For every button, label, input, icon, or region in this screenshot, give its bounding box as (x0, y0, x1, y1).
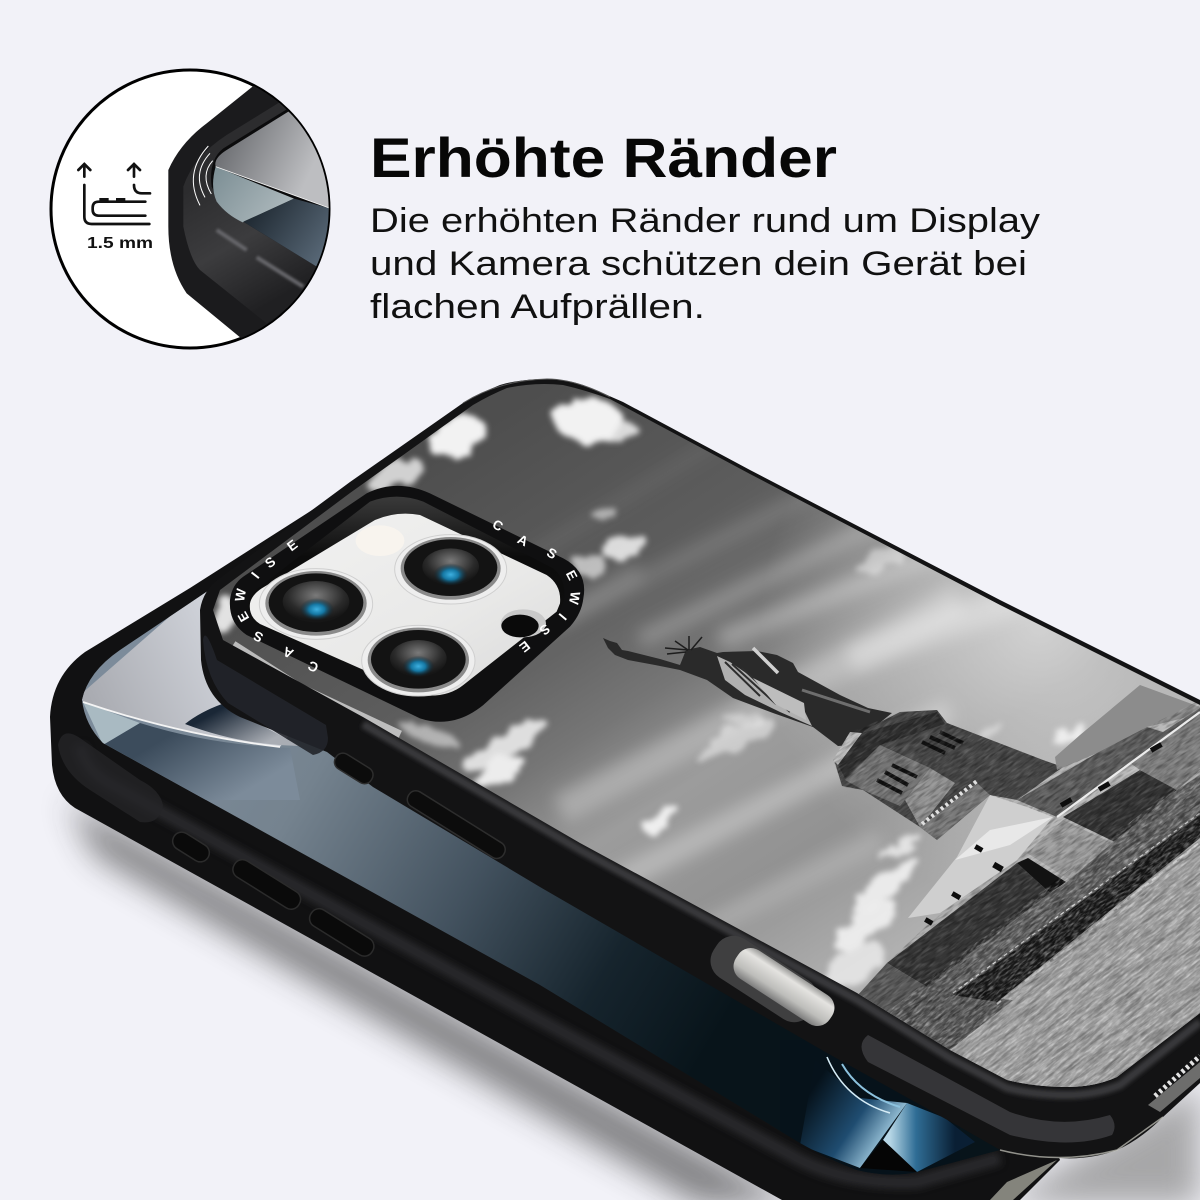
back phone camera control pad (58, 733, 163, 822)
statue (603, 636, 892, 746)
label: 1.5 mm: 1.5 mm (87, 235, 153, 252)
back phone buttons (169, 829, 377, 960)
ring (230, 486, 584, 722)
wallpaper panes at corner (800, 1056, 975, 1172)
ring lettering: CASEWISE: C (490, 517, 506, 534)
circle background (51, 70, 329, 348)
pedestal (833, 710, 1063, 840)
detail phone corner (168, 86, 329, 338)
silver camera plate (250, 514, 560, 696)
lens 3 (362, 625, 475, 696)
ring lettering: CASEWISE: E (517, 638, 533, 655)
ring lettering: CASEWISE: S (544, 545, 559, 562)
ring lettering: CASEWISE: C (305, 658, 321, 675)
ring lettering: CASEWISE: E (284, 537, 300, 554)
ring inner wall (248, 497, 564, 697)
ring lettering: CASEWISE: A (515, 532, 531, 549)
sky streaks (552, 495, 1018, 926)
ring lettering: CASEWISE: E (235, 609, 252, 624)
charging port (703, 928, 840, 1032)
edge shine (1000, 1117, 1163, 1158)
body text: Die erhöhten Ränder rund um Display (370, 202, 1040, 240)
water (890, 768, 1200, 1087)
microphone dot (501, 609, 546, 637)
ring lettering: CASEWISE: I (556, 610, 570, 623)
circular detail callout (51, 60, 340, 360)
ring lettering: CASEWISE: A (280, 644, 296, 661)
back phone bottom edge (990, 1160, 1057, 1200)
phone behind (50, 468, 1060, 1200)
photo on case: Statue of Liberty (213, 378, 1200, 1087)
title: Erhöhte Ränder (370, 126, 837, 189)
lens 1 (259, 569, 373, 639)
clouds (213, 398, 1088, 998)
body text: flachen Aufprällen. (370, 288, 705, 326)
ring lettering: CASEWISE: W (566, 590, 583, 606)
camera island (230, 486, 584, 722)
fort windows (924, 742, 1163, 926)
bottom grille (1148, 1056, 1200, 1112)
front phone buttons (331, 750, 508, 861)
ring lettering: CASEWISE: E (563, 568, 580, 583)
body text (370, 202, 1040, 326)
ring lettering: CASEWISE: I (248, 569, 262, 581)
back phone bumper highlight (80, 745, 1000, 1182)
top edge rim highlight (463, 379, 610, 403)
light strip beside camera ring (233, 645, 400, 735)
ring lettering: CASEWISE: S (262, 554, 278, 571)
island (833, 685, 1200, 1050)
ring lettering: CASEWISE (232, 517, 583, 675)
flash (356, 525, 404, 556)
front side pad (203, 636, 328, 755)
stone texture (833, 702, 1200, 1049)
body text: und Kamera schützen dein Gerät bei (370, 245, 1027, 283)
phone in front (200, 370, 1200, 1200)
lens 2 (395, 535, 507, 604)
cast shadow under back phone (68, 800, 1200, 1200)
front phone body (200, 379, 1200, 1158)
sky (200, 370, 1200, 1100)
ring lettering: CASEWISE: S (537, 621, 553, 638)
corner pad (862, 1035, 1115, 1142)
icon: raised edge diagram (78, 164, 150, 224)
back phone body (50, 468, 1060, 1200)
ring lettering: CASEWISE: S (251, 628, 265, 645)
back phone screen (82, 591, 1000, 1175)
fort (light walls) (908, 795, 1053, 918)
front bumper inner highlight (363, 724, 1200, 1095)
ring lettering: CASEWISE: W (232, 587, 249, 603)
